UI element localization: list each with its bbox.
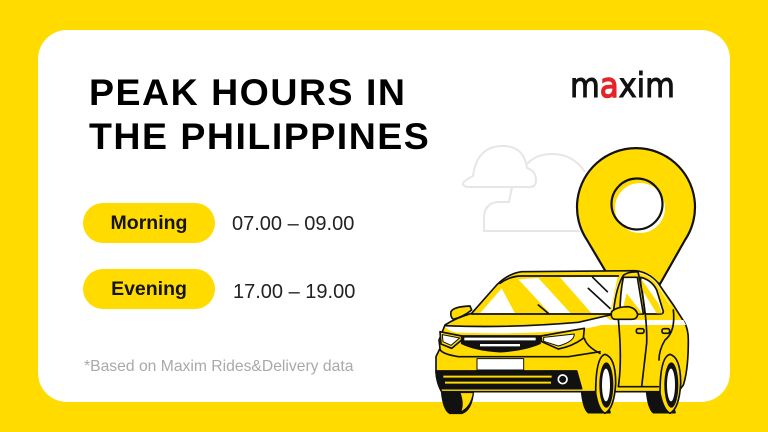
logo: maxim: maxim xyxy=(570,66,675,106)
icon: car xyxy=(436,271,688,413)
car body xyxy=(436,271,688,392)
title xyxy=(89,71,430,156)
time: evening: 17.00 – 19.00 xyxy=(233,281,355,303)
pill: morning xyxy=(83,203,215,243)
white card panel xyxy=(38,30,730,402)
license plate xyxy=(477,359,524,370)
door frame xyxy=(612,273,670,313)
hood white band xyxy=(445,316,686,333)
left headlight xyxy=(440,332,462,348)
side mirror right xyxy=(611,307,638,319)
doors xyxy=(618,273,674,387)
grille xyxy=(462,336,540,352)
title: THE PHILIPPINES xyxy=(89,114,430,156)
front wheel xyxy=(582,354,616,413)
footnote: *Based on Maxim Rides&Delivery data xyxy=(84,358,353,375)
front-left tyre xyxy=(442,392,473,413)
rear wheel xyxy=(647,354,681,413)
side windows xyxy=(620,277,643,314)
pill: evening: Evening xyxy=(111,278,187,300)
right headlight xyxy=(541,328,584,349)
icon: map pin xyxy=(577,148,695,284)
fender lines xyxy=(440,338,600,357)
pill: morning: Morning xyxy=(111,212,187,234)
icon: clouds xyxy=(463,146,585,231)
windshield outline and glints xyxy=(472,276,618,314)
windshield reflections xyxy=(480,277,618,313)
windshield xyxy=(480,277,618,313)
fog light xyxy=(558,375,567,384)
door handles xyxy=(636,329,644,333)
lower bumper xyxy=(436,371,582,389)
side mirror left xyxy=(451,306,472,319)
pill: evening xyxy=(83,269,215,309)
time: morning: 07.00 – 09.00 xyxy=(232,213,354,235)
title: PEAK HOURS IN xyxy=(89,71,406,113)
